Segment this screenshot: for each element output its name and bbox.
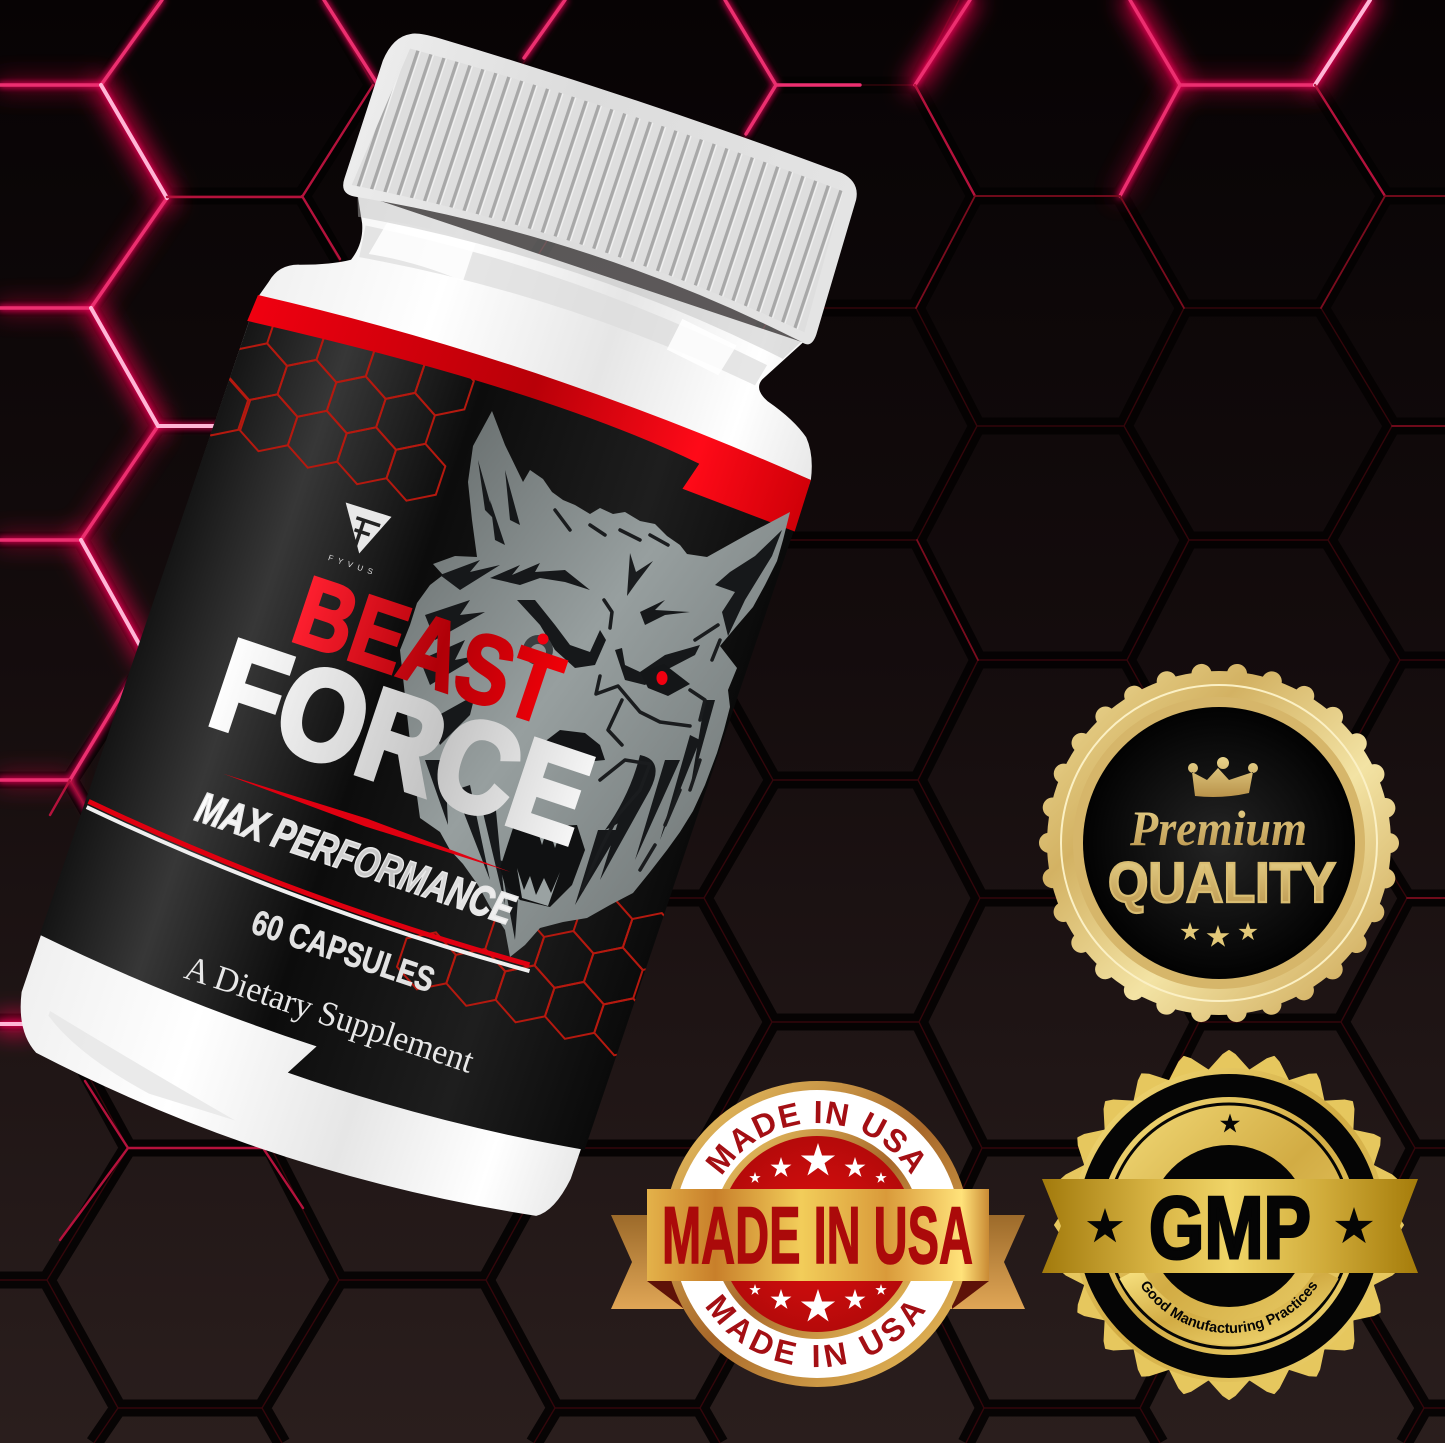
black disc bbox=[1083, 707, 1355, 979]
thin black ring bbox=[1107, 1104, 1351, 1348]
60 CAPSULES: 60 CAPSULES bbox=[247, 903, 439, 1000]
badge: premium quality bbox=[1047, 671, 1391, 1015]
three stars bbox=[1180, 922, 1258, 947]
wolf fur and brow lines bbox=[555, 510, 720, 890]
ring text top: MADE IN USA bbox=[705, 1101, 924, 1175]
wolf head illustration bbox=[400, 411, 790, 957]
outer gold ring bbox=[664, 1081, 970, 1387]
ribbon stars bbox=[1087, 1207, 1373, 1243]
gold sunburst edge bbox=[1055, 1051, 1403, 1399]
curved caption: Good Manufacturing Practices bbox=[1142, 1282, 1317, 1334]
top star bbox=[1220, 1114, 1240, 1132]
ribbon text: MADE IN USA bbox=[662, 1191, 973, 1281]
label hexagon pattern: top bbox=[210, 326, 475, 502]
FYVUS logo: FYVUS bbox=[327, 553, 379, 578]
Premium script: Premium bbox=[1129, 800, 1307, 856]
bottle body bbox=[0, 173, 851, 1247]
FYVUS logo bbox=[326, 502, 396, 578]
badge: made in USA bbox=[611, 1081, 1025, 1387]
ribbon tails bbox=[611, 1215, 1025, 1309]
neck highlights bbox=[367, 211, 742, 378]
wolf teeth bbox=[517, 822, 563, 906]
A Dietary Supplement: A Dietary Supplement bbox=[180, 948, 479, 1081]
gold ribbon bbox=[647, 1189, 989, 1281]
wolf mouth bbox=[500, 825, 585, 907]
gold ring bbox=[1100, 1097, 1358, 1355]
label hexagon pattern: bottom bbox=[396, 901, 664, 1056]
bottle bbox=[20, 34, 857, 1216]
fine gold ring bbox=[1061, 685, 1377, 1001]
forehead mark bbox=[627, 553, 653, 596]
black outer ring bbox=[1077, 1074, 1381, 1378]
QUALITY: QUALITY bbox=[1108, 851, 1336, 915]
inner gold ring bbox=[712, 1129, 922, 1339]
left eye bbox=[523, 634, 553, 665]
gold ribbon bbox=[1042, 1179, 1418, 1273]
BEAST wordmark: BEAST bbox=[282, 555, 574, 746]
white stars bbox=[749, 1143, 887, 1322]
thin red rule bbox=[222, 771, 513, 875]
wolf nose bbox=[543, 730, 605, 763]
crown icon bbox=[1188, 757, 1258, 797]
FORCE wordmark: FORCE bbox=[196, 613, 607, 871]
red disc bbox=[719, 1136, 915, 1332]
right eye bbox=[640, 664, 690, 696]
white ring bbox=[673, 1090, 961, 1378]
scalloped gold edge bbox=[1049, 673, 1389, 1013]
base reflection bbox=[35, 1011, 249, 1122]
cap collar bbox=[350, 177, 807, 363]
badge: GMP bbox=[1042, 1050, 1418, 1400]
center black disc bbox=[1148, 1145, 1310, 1307]
cap ribs bbox=[352, 38, 852, 336]
bottle local frame bbox=[20, 34, 857, 1216]
wolf black fur marks bbox=[420, 460, 782, 940]
gold disc bbox=[1047, 671, 1391, 1015]
MAX PERFORMANCE tagline: MAX PERFORMANCE bbox=[190, 784, 521, 935]
label background bbox=[23, 286, 814, 1171]
ring text bottom: MADE IN USA bbox=[706, 1294, 926, 1368]
screw cap bbox=[339, 20, 869, 350]
inner ring bbox=[1073, 697, 1365, 989]
red and white swoosh bbox=[81, 801, 536, 975]
gold disc bbox=[1072, 1068, 1386, 1382]
lower gold arc for text bbox=[1130, 1273, 1328, 1333]
neck reflection bbox=[355, 215, 772, 391]
GMP: GMP bbox=[1149, 1178, 1311, 1277]
label text frame bbox=[43, 511, 633, 1089]
red top band bbox=[239, 281, 816, 532]
